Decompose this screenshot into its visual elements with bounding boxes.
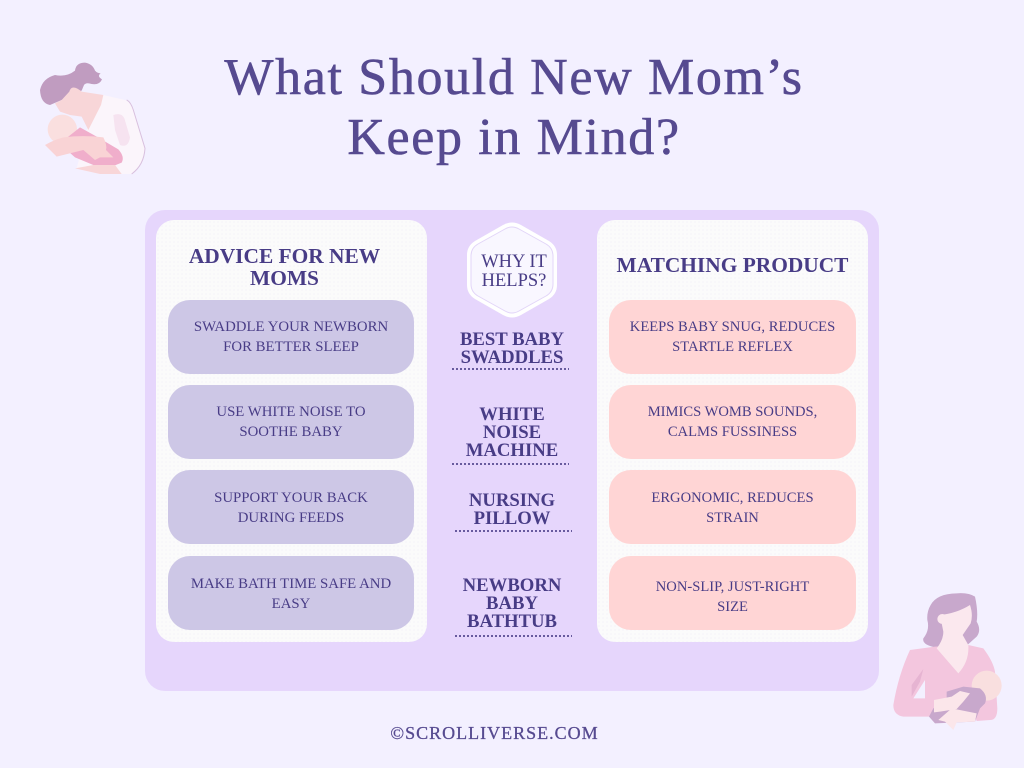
- title: [224, 49, 804, 166]
- footer credit: ©SCROLLIVERSE.COM: [390, 723, 599, 743]
- advice 4: MAKE BATH TIME SAFE AND: [191, 576, 391, 592]
- product 4: [463, 575, 562, 632]
- reason 2: CALMS FUSSINESS: [668, 424, 797, 440]
- text: why it helps: WHY IT: [481, 252, 547, 272]
- reason 1: [609, 300, 856, 374]
- advice 1: FOR BETTER SLEEP: [223, 339, 359, 355]
- heading: advice for new moms: ADVICE FOR NEW: [189, 244, 380, 268]
- product 1: BEST BABY: [460, 329, 564, 350]
- advice 3: DURING FEEDS: [238, 510, 344, 526]
- heading: advice for new moms: MOMS: [250, 266, 319, 290]
- product 1: [460, 329, 564, 368]
- reason 2: [609, 385, 856, 459]
- product 1: SWADDLES: [461, 347, 563, 368]
- title: Keep in Mind?: [347, 109, 681, 166]
- heading: matching product: MATCHING PRODUCT: [617, 253, 848, 277]
- heading: advice for new moms: [189, 244, 380, 290]
- advice 3: SUPPORT YOUR BACK: [214, 490, 368, 506]
- reason 4: NON-SLIP, JUST-RIGHT: [656, 579, 809, 595]
- reason 3: STRAIN: [706, 510, 759, 526]
- icon: mother cradling baby, top left: [40, 62, 146, 174]
- icon: mother nursing baby, bottom right: [893, 593, 1002, 730]
- product 4: BATHTUB: [467, 611, 557, 632]
- advice 2: USE WHITE NOISE TO: [216, 404, 366, 420]
- advice 3: [168, 470, 414, 544]
- product 3: PILLOW: [474, 508, 550, 529]
- reason 3: ERGONOMIC, REDUCES: [651, 490, 814, 506]
- advice 1: [168, 300, 414, 374]
- advice 1: SWADDLE YOUR NEWBORN: [194, 319, 388, 335]
- reason 4: SIZE: [717, 599, 748, 615]
- text: why it helps: HELPS?: [482, 271, 546, 291]
- product 3: [469, 490, 555, 529]
- text: why it helps: [481, 252, 547, 291]
- reason 1: STARTLE REFLEX: [672, 339, 793, 355]
- product 2: WHITE: [479, 404, 545, 425]
- advice 2: [168, 385, 414, 459]
- reason 3: [609, 470, 856, 544]
- product 2: NOISE: [483, 422, 541, 443]
- product 2: [466, 404, 558, 461]
- advice 4: [168, 556, 414, 630]
- advice 2: SOOTHE BABY: [239, 424, 343, 440]
- product 2: MACHINE: [466, 440, 558, 461]
- icon: why it helps hexagon badge: [467, 222, 557, 318]
- reason 4: [609, 556, 856, 630]
- product 4: BABY: [486, 593, 538, 614]
- advice 4: EASY: [272, 596, 310, 612]
- panel: advice for new moms: [156, 220, 427, 642]
- panel: main lilac background: [145, 210, 879, 691]
- product 4: NEWBORN: [463, 575, 561, 596]
- title: What Should New Mom’s: [224, 49, 804, 106]
- product 3: NURSING: [469, 490, 555, 511]
- reason 1: KEEPS BABY SNUG, REDUCES: [630, 319, 835, 335]
- panel: matching product: [597, 220, 868, 642]
- reason 2: MIMICS WOMB SOUNDS,: [648, 404, 817, 420]
